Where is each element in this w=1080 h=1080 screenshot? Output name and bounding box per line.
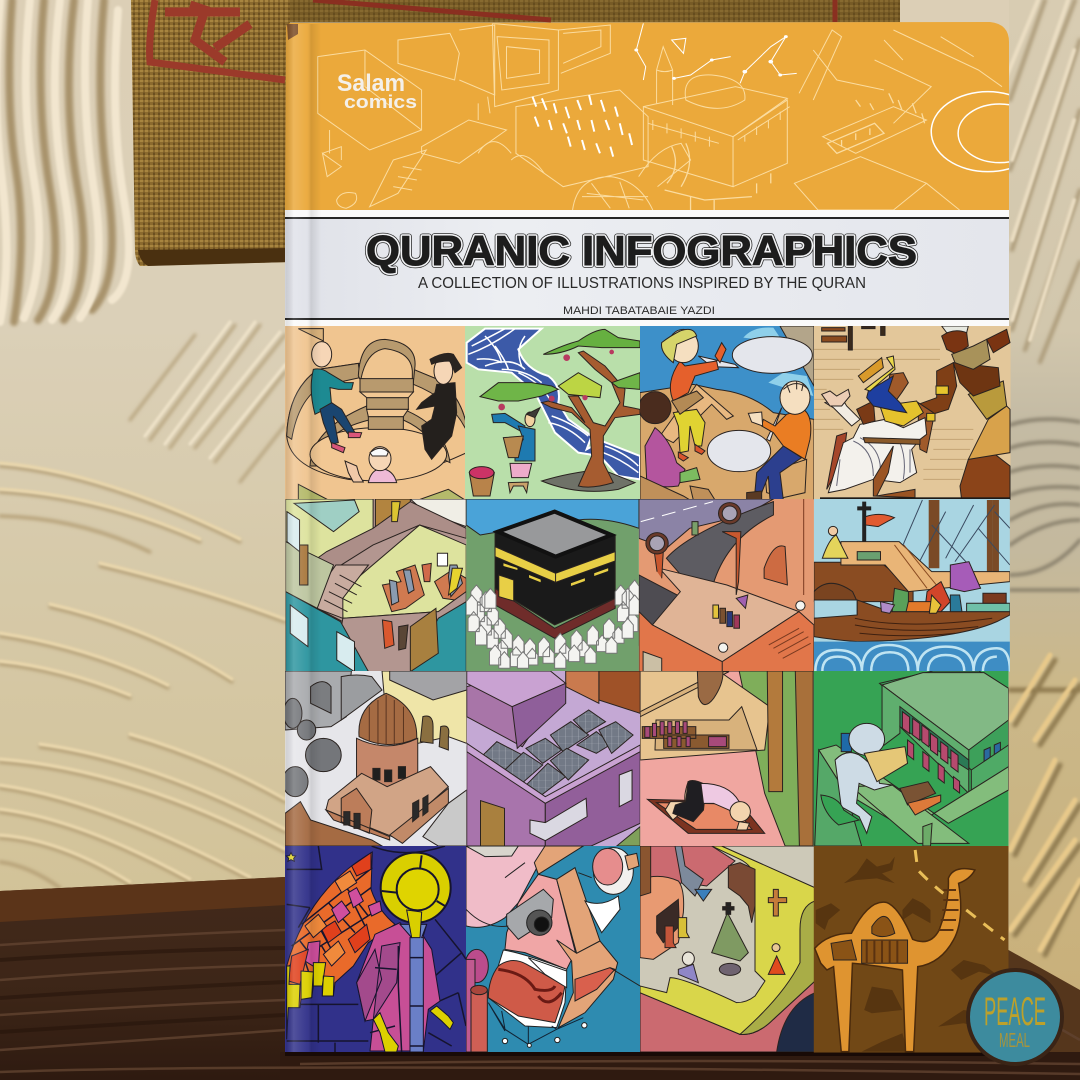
illustration grid: row 4 right [814, 846, 1009, 1053]
panel: ship at sea [814, 499, 1010, 672]
panel: isometric house interior [286, 499, 466, 672]
burlap book behind [131, 0, 900, 266]
author: MAHDI TABATABAIE YAZDI [563, 305, 715, 317]
title: QURANIC INFOGRAPHICS [366, 227, 917, 274]
panel: face with camera eye [465, 846, 640, 1052]
panel: prayer room [640, 671, 814, 846]
publisher logo: comics [344, 92, 417, 112]
panel: stained glass figure [285, 846, 466, 1053]
panel: scholar at library desk [814, 671, 1009, 846]
constellation lines [635, 23, 797, 83]
title: QURANIC INFOGRAPHICS [366, 227, 917, 274]
panel: domed mosque [283, 671, 467, 846]
illustration grid: row 2 and row 3 [283, 499, 1010, 846]
panel: children talking with speech bubbles [639, 326, 814, 500]
cover lighting and spine [285, 24, 1009, 1052]
panel: ancient Egypt scene [814, 326, 1011, 500]
publisher logo [337, 70, 417, 112]
panel: purple building with solar panels [467, 671, 640, 846]
publisher logo: Salam [337, 70, 405, 97]
panel: room with Christmas tree [640, 846, 815, 1052]
illustration grid: row 1 left [285, 326, 640, 500]
panel: camel with tribal pattern [814, 846, 1009, 1053]
book cover [283, 22, 1044, 1053]
panel: isometric plaza with fans [639, 499, 814, 672]
badge: Peace Meal logo [968, 970, 1062, 1064]
illustration grid: row 1 right [639, 326, 1011, 500]
title band [285, 210, 1009, 326]
cover: orange header illustration [285, 22, 1044, 212]
subtitle: A COLLECTION OF ILLUSTRATIONS INSPIRED BY THE QURAN [418, 275, 866, 292]
panel: Kaaba with pilgrims [466, 499, 640, 672]
illustration grid: row 4 left [285, 846, 640, 1053]
title: QURANIC INFOGRAPHICS [366, 227, 917, 274]
panel: amphitheatre discussion [285, 326, 467, 500]
wooden table [0, 877, 1080, 1080]
panel: man picking fruit [465, 326, 640, 500]
illustration grid: row 4 third [640, 846, 815, 1052]
badge: Peace Meal logo: MEAL [999, 1030, 1030, 1052]
